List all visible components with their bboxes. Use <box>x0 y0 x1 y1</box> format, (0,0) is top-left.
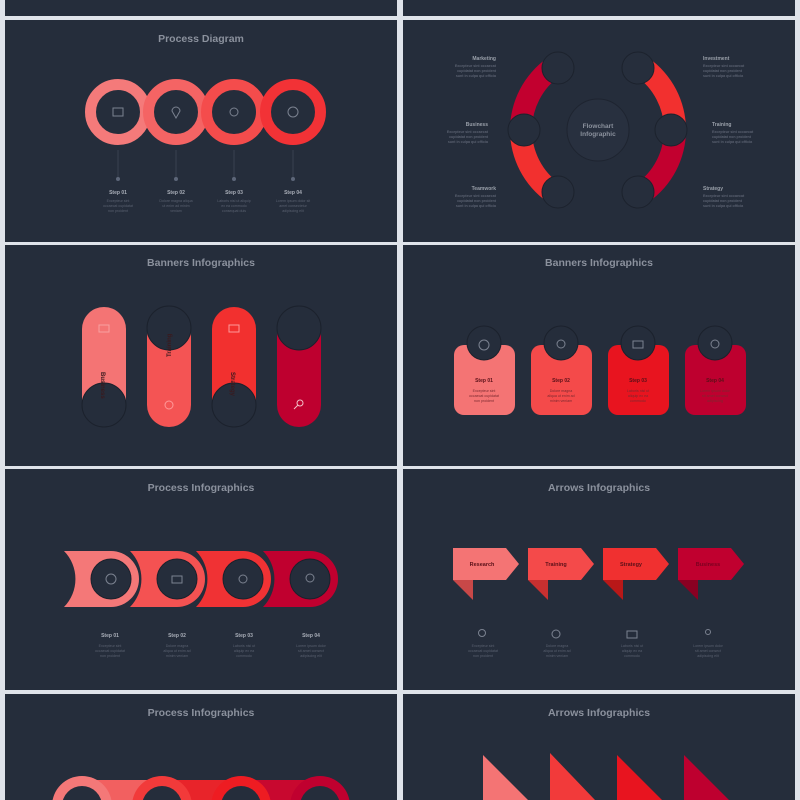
flowchart labels: Business <box>466 122 488 128</box>
step labels: non proident <box>100 654 120 658</box>
step connectors and labels: Laboris nisi ut aliquip <box>217 199 251 203</box>
step labels: Dolore magna <box>166 644 188 648</box>
cards: sit amet consect <box>702 394 728 398</box>
step labels: Step 02 <box>168 633 186 639</box>
pills: Business <box>99 372 105 399</box>
step connectors and labels: ut enim ad minim <box>162 204 190 208</box>
flowchart labels: sunt in culpa qui officia <box>712 140 753 144</box>
step labels: adipiscing elit <box>300 654 322 658</box>
heading: banners infographics: Banners Infographics <box>147 257 255 269</box>
flowchart labels: Excepteur sint occaecat <box>447 130 489 134</box>
step labels: commodo <box>236 654 252 658</box>
flowchart labels: Marketing <box>472 56 496 62</box>
pills <box>82 306 321 427</box>
flowchart labels: Excepteur sint occaecat <box>703 194 745 198</box>
arrows: Training <box>545 562 567 568</box>
node circles <box>508 52 687 208</box>
flowchart labels: Excepteur sint occaecat <box>712 130 754 134</box>
flowchart labels: sunt in culpa qui officia <box>456 74 497 78</box>
icons and descriptions: adipiscing elit <box>697 654 719 658</box>
icons and descriptions: Laboris nisi ut <box>621 644 643 648</box>
cards: minim veniam <box>550 399 572 403</box>
center circle <box>567 99 629 161</box>
step labels: Lorem ipsum dolor <box>296 644 327 648</box>
icons and descriptions: Lorem ipsum dolor <box>693 644 724 648</box>
flowchart labels: Training <box>712 122 731 128</box>
step labels: Laboris nisi ut <box>233 644 255 648</box>
pills: Training <box>167 333 173 357</box>
step labels: Step 04 <box>302 633 320 639</box>
step labels: occaecat cupidatat <box>95 649 125 653</box>
flowchart labels: cupidatat non proident <box>703 69 743 73</box>
panel: flowchart infographic <box>403 20 795 242</box>
step connectors and labels: amet consectetur <box>279 204 308 208</box>
flowchart labels: sunt in culpa qui officia <box>456 204 497 208</box>
icons and descriptions: Excepteur sint <box>472 644 494 648</box>
panel: top-left partial <box>5 0 397 16</box>
arrows: Business <box>696 562 720 568</box>
step labels: Step 01 <box>101 633 119 639</box>
arrows: Research <box>470 562 495 568</box>
step connectors and labels: Excepteur sint <box>107 199 129 203</box>
heading: arrows infographics: Arrows Infographics <box>548 482 650 494</box>
flowchart labels: Teamwork <box>472 186 496 192</box>
panel: arrows infographics 2 <box>403 694 795 800</box>
linked lobes <box>52 776 350 800</box>
step connectors and labels: ex ea commodo <box>221 204 247 208</box>
cards <box>454 326 746 415</box>
cards: aliquip ex ea <box>628 394 648 398</box>
flowchart labels: sunt in culpa qui officia <box>703 74 744 78</box>
step connectors and labels: Step 04 <box>284 190 302 196</box>
heading: process diagram: Process Diagram <box>158 33 244 45</box>
step labels: Excepteur sint <box>99 644 121 648</box>
step connectors and labels: Lorem ipsum dolor sit <box>276 199 310 203</box>
ring segments <box>510 58 686 202</box>
panel: top-right partial <box>403 0 795 16</box>
icons and descriptions: non proident <box>473 654 493 658</box>
cards: Step 01 <box>475 378 493 384</box>
step connectors and labels: Step 02 <box>167 190 185 196</box>
cards: commodo <box>630 399 646 403</box>
panel: process diagram <box>5 20 397 242</box>
step labels: Step 03 <box>235 633 253 639</box>
icons and descriptions: sit amet consect <box>695 649 721 653</box>
step connectors and labels: non proident <box>108 209 128 213</box>
panel: arrows infographics <box>403 469 795 690</box>
cards: Step 02 <box>552 378 570 384</box>
flowchart labels: Excepteur sint occaecat <box>455 194 497 198</box>
step labels: sit amet consect <box>298 649 324 653</box>
heading: arrows infographics: Arrows Infographics <box>548 707 650 719</box>
cards: Excepteur sint <box>473 389 495 393</box>
D-shaped steps <box>64 551 338 607</box>
icons and descriptions: aliqua ut enim ad <box>543 649 571 653</box>
step connectors and labels: Dolore magna aliqua <box>159 199 193 203</box>
cards: adipiscing <box>707 399 723 403</box>
center circle: Flowchart <box>583 123 614 130</box>
icons and descriptions: aliquip ex ea <box>622 649 642 653</box>
cards: non proident <box>474 399 494 403</box>
icons and descriptions: commodo <box>624 654 640 658</box>
icons and descriptions: minim veniam <box>546 654 568 658</box>
diagonal arrows <box>483 753 729 800</box>
flowchart labels: cupidatat non proident <box>703 199 743 203</box>
step connectors and labels: consequat duis <box>222 209 246 213</box>
center circle: Infographic <box>580 131 616 138</box>
panel: process infographics 2 <box>5 694 397 800</box>
step connectors and labels: adipiscing elit <box>282 209 304 213</box>
panel: banners cards <box>403 245 795 466</box>
step connectors and labels: veniam <box>170 209 182 213</box>
step labels <box>95 633 327 658</box>
rings <box>90 84 320 140</box>
flowchart labels: sunt in culpa qui officia <box>448 140 489 144</box>
flowchart labels: Excepteur sint occaecat <box>455 64 497 68</box>
heading: process infographics: Process Infographics <box>148 482 255 494</box>
arrows: Strategy <box>620 562 643 568</box>
cards: Lorem ipsum dolor <box>700 389 731 393</box>
step connectors and labels: Step 01 <box>109 190 127 196</box>
step labels: minim veniam <box>166 654 188 658</box>
flowchart labels <box>447 56 754 208</box>
flowchart labels: cupidatat non proident <box>457 199 497 203</box>
heading: banners infographics: Banners Infographics <box>545 257 653 269</box>
step connectors and labels: occaecat cupidatat <box>103 204 133 208</box>
panel: process infographics <box>5 469 397 690</box>
cards: Step 03 <box>629 378 647 384</box>
flowchart labels: sunt in culpa qui officia <box>703 204 744 208</box>
icons and descriptions: Dolore magna <box>546 644 568 648</box>
cards: aliqua ut enim ad <box>547 394 575 398</box>
flowchart labels: cupidatat non proident <box>449 135 489 139</box>
step labels: aliquip ex ea <box>234 649 254 653</box>
arrows <box>453 548 744 600</box>
icons and descriptions: occaecat cupidatat <box>468 649 498 653</box>
flowchart labels: cupidatat non proident <box>712 135 752 139</box>
cards: occaecat cupidatat <box>469 394 499 398</box>
pills: Strategy <box>229 372 235 397</box>
step labels: aliqua ut enim ad <box>163 649 191 653</box>
cards: Laboris nisi ut <box>627 389 649 393</box>
flowchart labels: Excepteur sint occaecat <box>703 64 745 68</box>
icons and descriptions <box>468 630 724 658</box>
flowchart labels: Strategy <box>703 186 723 192</box>
step connectors and labels <box>103 150 310 213</box>
cards: Step 04 <box>706 378 724 384</box>
cards: Dolore magna <box>550 389 572 393</box>
panel: banners pills <box>5 245 397 466</box>
flowchart labels: cupidatat non proident <box>457 69 497 73</box>
heading: process infographics: Process Infographics <box>148 707 255 719</box>
flowchart labels: Investment <box>703 56 730 62</box>
step connectors and labels: Step 03 <box>225 190 243 196</box>
